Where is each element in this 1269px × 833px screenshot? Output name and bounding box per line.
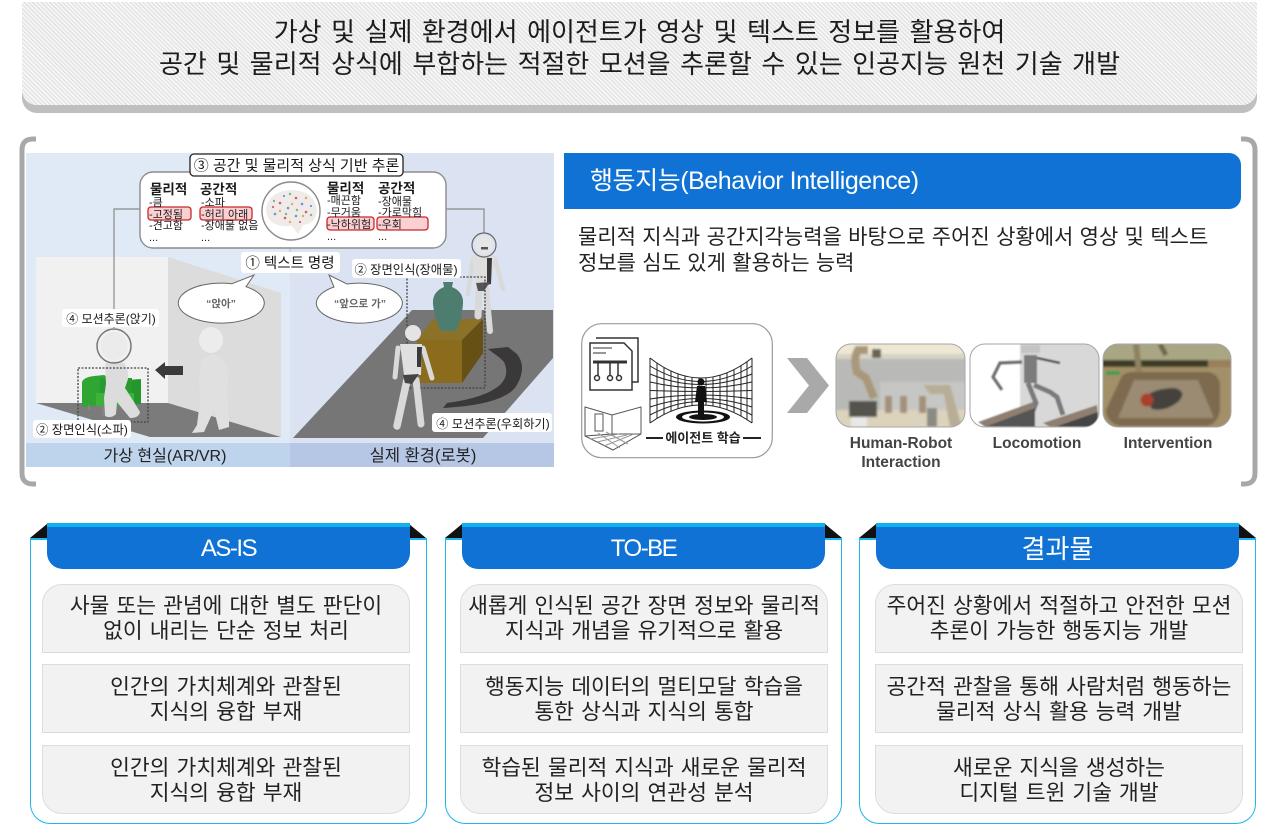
panel: AS-IS — [30, 523, 427, 824]
caption: human-robot interaction: Interaction — [861, 454, 941, 471]
illustration: virtual and real environment inference — [26, 153, 554, 467]
left reasoning lists: -소파 — [201, 196, 225, 209]
caption: locomotion: Locomotion — [993, 435, 1081, 452]
heading: TO-BE: TO-BE — [611, 535, 676, 562]
item: organic use of knowledge: 새롭게 인식된 공간 장면 정보와 물리적 — [468, 594, 820, 618]
label: motion inference detour: ④ 모션추론(우회하기) — [436, 417, 550, 431]
item: multimodal learning: 행동지능 데이터의 멀티모달 학습을 — [485, 675, 803, 699]
title line 1: 가상 및 실제 환경에서 에이전트가 영상 및 텍스트 정보를 활용하여 — [274, 17, 1005, 47]
front robot — [395, 325, 432, 426]
left reasoning lists: ... — [149, 232, 158, 244]
label: text command — [241, 252, 340, 273]
behavior intelligence heading: 행동지능(Behavior Intelligence) — [590, 167, 919, 195]
label: scene recognition sofa: ② 장면인식(소파) — [36, 423, 128, 437]
item: behavior intelligence development: 추론이 가능한 행동지능 개발 — [930, 619, 1188, 643]
caption: human-robot interaction: Human-Robot — [850, 435, 952, 452]
section bracket frame — [20, 136, 1258, 486]
photo: human-robot interaction — [836, 344, 966, 428]
behavior intelligence description: 물리적 지식과 공간지각능력을 바탕으로 주어진 상황에서 영상 및 텍스트 — [578, 226, 1208, 249]
item: multimodal learning: 통한 상식과 지식의 통합 — [534, 700, 754, 724]
sofa — [82, 375, 141, 416]
arrow: direction to sofa — [155, 362, 183, 379]
icon: curved grid with agent — [650, 358, 752, 424]
right reasoning lists: 공간적 — [378, 181, 415, 196]
right reasoning lists: -장애물 — [378, 195, 412, 208]
behavior intelligence description — [578, 226, 1208, 275]
label: agent learning — [646, 430, 761, 446]
right reasoning lists: -가로막힘 — [378, 206, 422, 219]
right reasoning lists: -매끈함 — [327, 194, 361, 207]
heading: results — [876, 523, 1239, 569]
heading: reasoning: ③ 공간 및 물리적 상식 기반 추론 — [194, 158, 400, 174]
photo: locomotion — [970, 344, 1100, 428]
item: lack of fusion — [42, 664, 410, 733]
item: correlation analysis: 정보 사이의 연관성 분석 — [534, 780, 754, 804]
heading: results: 결과물 — [1022, 534, 1093, 564]
right reasoning lists: -낙하위험 — [327, 217, 371, 231]
item: lack of fusion: 인간의 가치체계와 관찰된 — [110, 675, 342, 699]
heading: AS-IS — [47, 523, 410, 569]
item: simple information processing — [42, 584, 410, 653]
item: organic use of knowledge — [460, 584, 828, 653]
title banner — [22, 2, 1257, 105]
heading: AS-IS: AS-IS — [201, 535, 256, 562]
label: motion inference detour — [432, 413, 552, 432]
label: scene recognition obstacle — [352, 259, 461, 278]
right reasoning lists: ... — [378, 231, 387, 243]
speech bubble: go forward — [316, 275, 402, 323]
speech bubble: sit: “앉아” — [206, 297, 236, 310]
behavior intelligence description: 정보를 심도 있게 활용하는 능력 — [578, 252, 854, 275]
label: agent learning: 에이전트 학습 — [665, 430, 741, 446]
obstacle scene dotted box — [407, 277, 485, 388]
right reasoning lists: 물리적 — [327, 181, 364, 196]
item: lack of fusion repeated — [42, 745, 410, 814]
vase — [433, 282, 463, 331]
right reasoning lists — [327, 181, 422, 243]
item: digital twin: 디지털 트윈 기술 개발 — [959, 780, 1159, 804]
right reasoning lists: ... — [327, 231, 336, 243]
left reasoning lists: 공간적 — [200, 182, 237, 197]
item: physical common sense capability: 물리적 상식 활용 능력 개발 — [936, 700, 1182, 724]
real environment floor — [293, 310, 553, 438]
rear robot — [468, 236, 503, 331]
caption bar: virtual reality — [26, 443, 290, 467]
sofa scene dotted box — [78, 368, 148, 422]
item: lack of fusion repeated: 지식의 융합 부재 — [150, 780, 302, 804]
arrow: chevron to applications — [787, 358, 829, 413]
seated figure — [100, 332, 140, 418]
connector lines — [114, 153, 484, 328]
title line 2: 공간 및 물리적 상식에 부합하는 적절한 모션을 추론할 수 있는 인공지능 원천 기술 개발 — [159, 49, 1120, 79]
item: correlation analysis — [460, 745, 828, 814]
left reasoning lists: -장애물 없음 — [201, 219, 258, 232]
pedestal — [417, 319, 483, 383]
item: physical common sense capability — [875, 664, 1243, 733]
item: physical common sense capability: 공간적 관찰을 통해 사람처럼 행동하는 — [887, 675, 1231, 699]
item: digital twin: 새로운 지식을 생성하는 — [953, 756, 1165, 780]
caption bar: real environment: 실제 환경(로봇) — [370, 446, 476, 465]
label: scene recognition obstacle: ② 장면인식(장애물) — [354, 263, 458, 277]
curved detour arrow — [443, 347, 522, 408]
left reasoning lists: ... — [201, 232, 210, 244]
item: organic use of knowledge: 지식과 개념을 유기적으로 활용 — [505, 619, 783, 643]
item: lack of fusion repeated: 인간의 가치체계와 관찰된 — [110, 756, 342, 780]
caption: human-robot interaction — [850, 435, 952, 471]
behavior intelligence heading — [564, 153, 1241, 209]
speech bubble: sit — [178, 275, 264, 323]
heading: TO-BE — [462, 523, 825, 569]
head highlight circle — [97, 329, 131, 363]
item: lack of fusion: 지식의 융합 부재 — [150, 700, 302, 724]
left reasoning lists: -고정됨 — [149, 208, 183, 221]
rear robot head highlight — [472, 233, 496, 257]
left reasoning lists: -허리 아래 — [201, 208, 248, 221]
reasoning card — [140, 172, 446, 248]
icon: knowledge document — [590, 338, 638, 390]
right reasoning lists: -무거움 — [327, 206, 361, 219]
item: behavior intelligence development: 주어진 상황에서 적절하고 안전한 모션 — [887, 594, 1231, 618]
highlight boxes — [148, 207, 428, 230]
item: simple information processing: 사물 또는 관념에 대한 별도 판단이 — [70, 594, 382, 618]
item: simple information processing: 없이 내리는 단순 정보 처리 — [103, 619, 349, 643]
item: correlation analysis: 학습된 물리적 지식과 새로운 물리적 — [482, 756, 806, 780]
left reasoning lists: -큼 — [149, 197, 163, 209]
label: text command: ① 텍스트 명령 — [245, 255, 335, 272]
brain icon — [262, 182, 320, 240]
virtual room — [36, 257, 281, 437]
standing figure — [192, 327, 229, 433]
icon: empty room — [585, 407, 641, 450]
right reasoning lists: -우회 — [378, 218, 402, 231]
item: behavior intelligence development — [875, 584, 1243, 653]
label: motion inference sit: ④ 모션추론(앉기) — [66, 312, 156, 326]
agent learning box — [581, 323, 773, 458]
left reasoning lists: 물리적 — [150, 182, 187, 197]
speech bubble: go forward: “앞으로 가” — [334, 297, 386, 310]
photo: intervention — [1102, 344, 1232, 428]
panel: TO-BE — [445, 523, 842, 824]
left reasoning lists: -견고함 — [149, 219, 183, 232]
item: digital twin — [875, 745, 1243, 814]
caption: intervention: Intervention — [1124, 435, 1212, 452]
item: multimodal learning — [460, 664, 828, 733]
caption bar: virtual reality: 가상 현실(AR/VR) — [104, 447, 226, 465]
panel: results — [859, 523, 1256, 824]
left reasoning lists — [149, 182, 258, 244]
caption bar: real environment — [290, 443, 554, 467]
